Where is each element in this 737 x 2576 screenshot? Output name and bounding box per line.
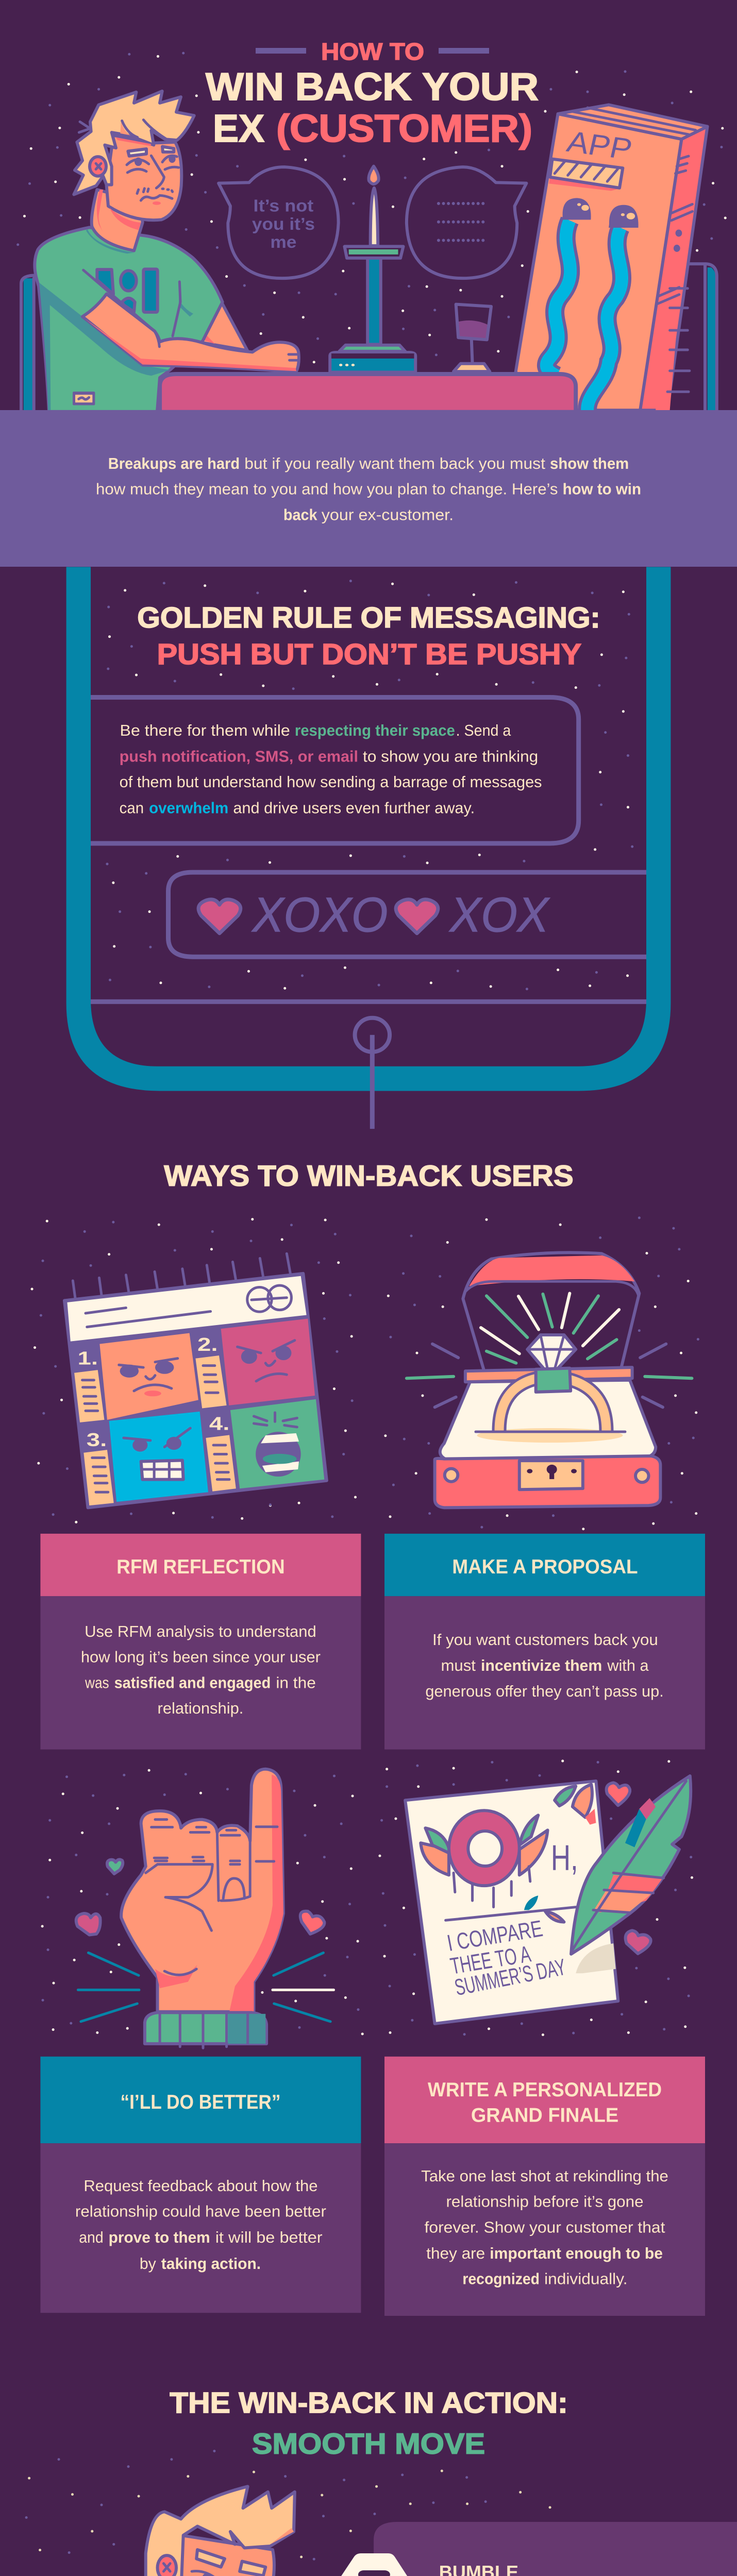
- card: ill do better: “I’LL DO BETTER”: [120, 2091, 280, 2113]
- illustration: hand gesture: [76, 1769, 334, 2048]
- cell 3 blue face: [109, 1412, 208, 1502]
- shirt logo: [97, 269, 158, 312]
- ring band: [499, 1377, 606, 1431]
- panel: intro band: [0, 410, 737, 567]
- number strips: [74, 1355, 236, 1505]
- message bubble: golden rule text: to show you are thinking: [363, 748, 538, 765]
- intro text: Breakups are hard: [108, 454, 240, 472]
- speech bubble: dotted reply: [407, 167, 526, 278]
- card: personalized grand finale: GRAND FINALE: [471, 2104, 618, 2126]
- message bubble: golden rule text: of them but understand how sending a barrage of messages: [120, 773, 542, 791]
- card: make a proposal: If you want customers back you: [432, 1631, 658, 1649]
- message bubble: golden rule text: can: [120, 799, 144, 817]
- card: rfm reflection: RFM REFLECTION: [116, 1555, 285, 1578]
- pocket patch: [73, 392, 95, 405]
- speech bubble: its not you: It’s not: [254, 196, 313, 215]
- body text: proposal card: with a: [607, 1657, 649, 1674]
- title dash right: [439, 48, 489, 54]
- title dash left: [256, 48, 306, 54]
- card: personalized grand finale: important enough to be: [490, 2244, 663, 2262]
- phone frame: [66, 567, 671, 1091]
- intro text: [96, 454, 641, 523]
- card: ill do better: relationship could have been better: [75, 2202, 326, 2220]
- card: personalized grand finale: [384, 2057, 705, 2316]
- message bubble: golden rule text: and drive users even further away.: [233, 799, 475, 817]
- card: ill do better: it will be better: [215, 2229, 323, 2246]
- body text: rfm card: how long it’s been since your user: [81, 1648, 321, 1666]
- body text: rfm card: satisfied and engaged: [114, 1674, 271, 1691]
- letter h: H,: [551, 1838, 578, 1878]
- card: make a proposal: MAKE A PROPOSAL: [452, 1555, 638, 1578]
- lid: [463, 1252, 639, 1371]
- shirt shadow: [39, 283, 170, 411]
- ear: [90, 157, 106, 176]
- letter rule line: [446, 1907, 576, 1920]
- near arm: [82, 294, 299, 371]
- message bubble: golden rule text: push notification, SMS, or email: [120, 748, 358, 765]
- letter shadow: [576, 1943, 616, 1973]
- phone divider line: [91, 999, 646, 1004]
- body text: proposal card: generous offer they can’t pass up.: [425, 1682, 664, 1700]
- intro text: show them: [550, 454, 629, 472]
- heading: win-back in action: THE WIN-BACK IN ACTION:: [170, 2386, 568, 2419]
- intro text: your ex-customer.: [322, 506, 454, 523]
- letter verse: SUMMER’S DAY: [452, 1954, 568, 2001]
- icon: wine glass: [454, 304, 491, 371]
- card: ill do better: taking action.: [161, 2255, 261, 2272]
- message bubble: xoxo: [168, 872, 646, 957]
- title: win back your: WIN BACK YOUR: [206, 65, 539, 108]
- body text: rfm card: [81, 1648, 321, 1717]
- calendar numbers: 4.: [209, 1413, 229, 1434]
- card: personalized grand finale: WRITE A PERSONALIZED: [428, 2078, 662, 2100]
- illustration: happy man with phone: [41, 2486, 295, 2576]
- card: personalized grand finale: relationship before it’s gone: [446, 2193, 644, 2210]
- section: win-back in action bumble: [0, 2386, 737, 2576]
- speech bubble: its not you: me: [270, 233, 296, 252]
- head: [107, 135, 181, 220]
- wavy blue arm right: [588, 228, 622, 412]
- card: ill do better: prove to them: [109, 2229, 210, 2246]
- message bubble: golden rule text: Be there for them while: [120, 721, 290, 739]
- title: ex: EX: [213, 107, 264, 150]
- heading: ways to win-back users: WAYS TO WIN-BACK USERS: [164, 1159, 574, 1192]
- skull head left: [562, 198, 591, 220]
- card: ill do better: [40, 2057, 361, 2313]
- hand rays: [78, 1953, 334, 2022]
- icon: right chair: [687, 264, 717, 410]
- message bubble: xoxo: XOX: [448, 888, 550, 942]
- panel: bumble: [374, 2522, 737, 2576]
- icon: candle: [330, 166, 415, 372]
- body text: rfm card: in the: [276, 1674, 316, 1691]
- card: personalized grand finale: they are: [426, 2244, 485, 2262]
- intro text: how to win: [563, 480, 641, 498]
- heading: smooth move: SMOOTH MOVE: [252, 2427, 485, 2460]
- body text: proposal card: [425, 1657, 664, 1700]
- cell 4 green face: [230, 1399, 324, 1488]
- ring gem: [527, 1335, 576, 1369]
- hair: [146, 2486, 295, 2576]
- letter verse: I COMPARE: [445, 1915, 545, 1956]
- card: ill do better: and: [79, 2229, 104, 2246]
- app label: APP: [564, 125, 635, 166]
- calendar numbers: [77, 1334, 229, 1450]
- title: customer: (CUSTOMER): [276, 107, 532, 150]
- message bubble: golden rule text: . Send a: [456, 721, 511, 739]
- head: [162, 2535, 274, 2576]
- section: ways to win-back: [32, 1159, 705, 1750]
- card: personalized grand finale: recognized: [462, 2270, 540, 2287]
- phone home button: [355, 1018, 390, 1129]
- message bubble: golden rule text: [91, 698, 579, 843]
- card: personalized grand finale: individually.: [544, 2270, 628, 2287]
- illustration: rfm calendar: [64, 1253, 327, 1507]
- calendar numbers: 2.: [197, 1334, 218, 1355]
- hearts beside letter: [607, 1783, 630, 1805]
- message bubble: golden rule text: overwhelm: [149, 799, 228, 817]
- section: ways middle row: [40, 1648, 705, 2316]
- skull head right: [609, 205, 639, 228]
- calendar numbers: 1.: [77, 1348, 98, 1368]
- illustration: sad man at table: [35, 91, 299, 412]
- far arm: [179, 304, 247, 350]
- body text: rfm card: relationship.: [158, 1699, 243, 1717]
- intro text: how much they mean to you and how you plan to change. Here’s: [96, 480, 558, 498]
- ear: [158, 2555, 176, 2576]
- message bubble: xoxo: XOXO: [251, 888, 388, 942]
- letter verse: [445, 1915, 568, 2001]
- title: how to: HOW TO: [321, 38, 424, 65]
- wavy blue arm left: [546, 221, 571, 376]
- illustration: love letter: [405, 1776, 691, 2024]
- body text: proposal card: incentivize them: [481, 1657, 602, 1674]
- base cream: [440, 1380, 656, 1460]
- message bubble: golden rule text: respecting their space: [295, 721, 455, 739]
- illustration: ring box: [407, 1252, 692, 1507]
- hair: [74, 91, 194, 194]
- app hazard band: [549, 159, 623, 191]
- app box front face: [515, 114, 681, 410]
- speech bubble: its not you: [219, 167, 339, 278]
- calendar sheet: [64, 1274, 327, 1507]
- rim bar: [465, 1367, 632, 1382]
- neck: [92, 190, 143, 251]
- intro text: but if you really want them back you must: [244, 454, 545, 472]
- table: [160, 374, 576, 412]
- cell 2 pink face: [221, 1318, 315, 1405]
- speech bubble: its not you: you it’s: [252, 215, 315, 234]
- corner leaves: [555, 1786, 576, 1806]
- card: ill do better: Request feedback about how the: [83, 2177, 318, 2195]
- heading: push but dont be pushy: PUSH BUT DON’T BE PUSHY: [157, 638, 581, 670]
- card: make a proposal: [384, 1534, 705, 1750]
- sleeve cuff: [145, 2012, 266, 2044]
- panel: golden rule phone: [66, 567, 671, 1129]
- heading: golden rule: GOLDEN RULE OF MESSAGING:: [137, 601, 600, 634]
- card: rfm reflection: Use RFM analysis to understand: [85, 1622, 316, 1640]
- icon: left chair: [21, 276, 35, 410]
- letter verse: THEE TO A: [448, 1941, 533, 1979]
- card: personalized grand finale: Take one last shot at rekindling the: [421, 2167, 668, 2185]
- cell 1 orange face: [99, 1333, 198, 1420]
- title block: [206, 38, 539, 150]
- keyhole plate: [520, 1461, 583, 1489]
- section: hero illustration: [18, 53, 725, 412]
- card: personalized grand finale: forever. Show your customer that: [425, 2218, 665, 2236]
- feather: [571, 1776, 691, 1954]
- intro text: back: [283, 506, 317, 523]
- donut o: [421, 1810, 547, 1907]
- body text: rfm card: was: [85, 1674, 109, 1691]
- card: rfm reflection: [40, 1534, 361, 1750]
- illustration: app box character: [515, 105, 708, 412]
- face details: [173, 2550, 265, 2576]
- app box top: [558, 105, 708, 139]
- hearts beside hand: [107, 1859, 123, 1874]
- body text: proposal card: must: [441, 1657, 476, 1674]
- face details: [127, 147, 179, 205]
- light rays: [407, 1293, 692, 1407]
- icon: bumble logo: [333, 2553, 415, 2576]
- calendar numbers: 3.: [87, 1429, 107, 1450]
- calendar logo: [247, 1285, 291, 1312]
- base front coral: [435, 1456, 660, 1507]
- app box side face: [639, 127, 708, 410]
- green t-shirt: [35, 227, 223, 412]
- card: ill do better: by: [140, 2255, 157, 2272]
